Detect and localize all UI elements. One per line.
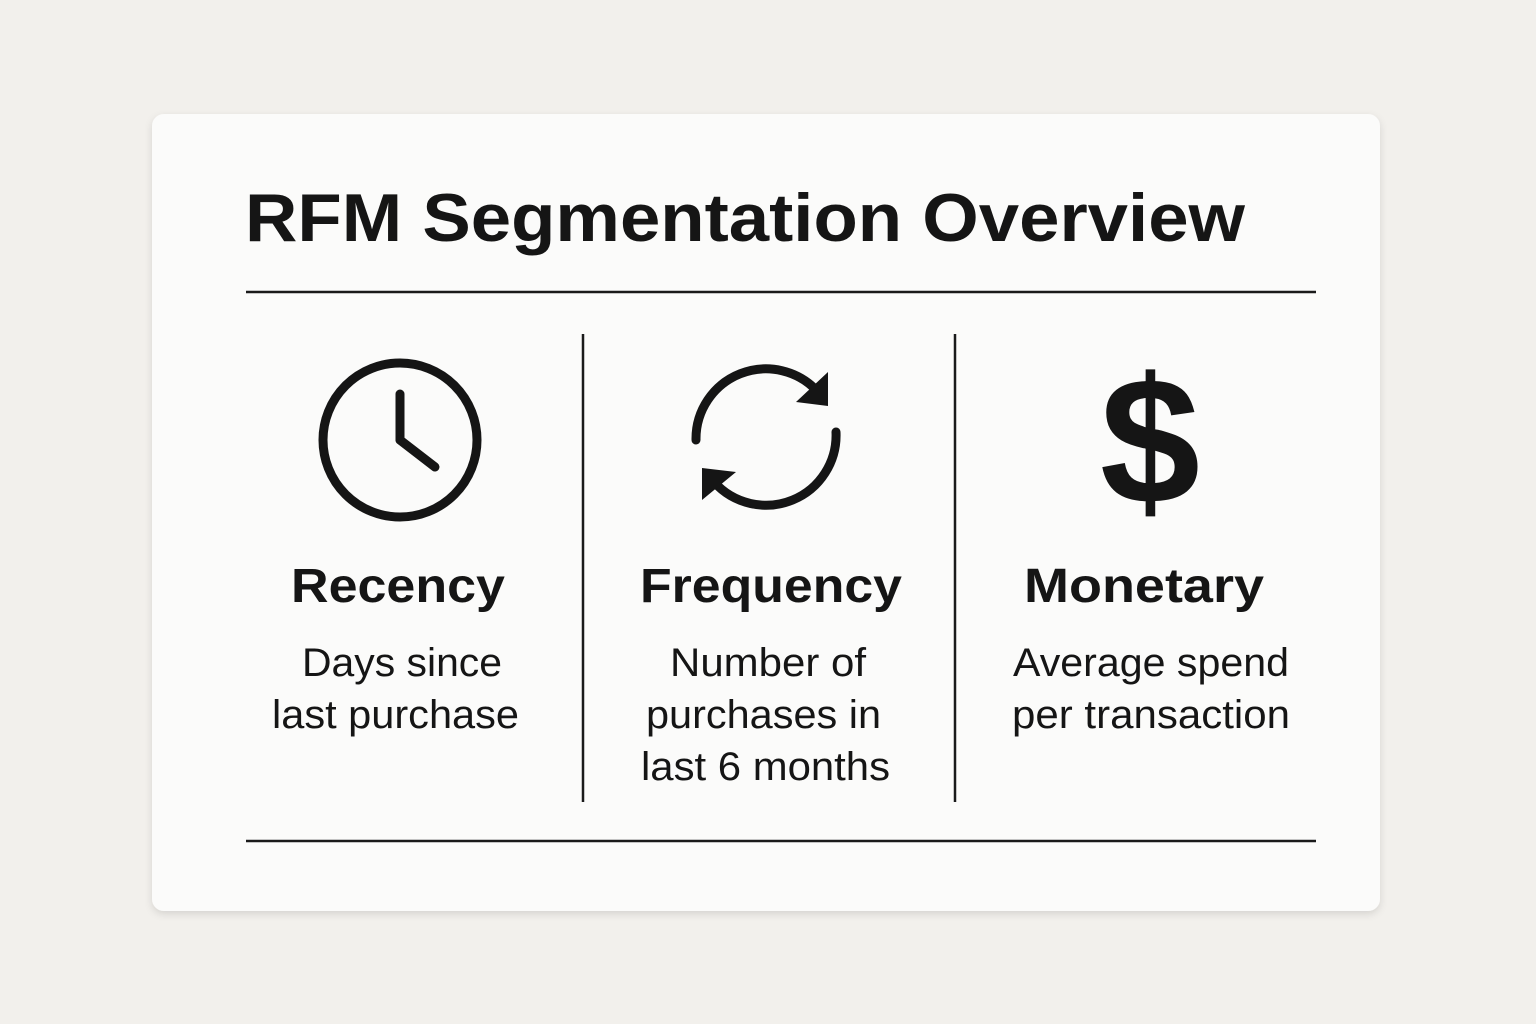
icon: refresh arrows — [696, 369, 836, 505]
description: monetary — [1012, 641, 1290, 737]
panel: frequency — [640, 369, 902, 789]
heading: Recency: Recency — [291, 560, 505, 613]
description: frequency: Number of — [670, 641, 867, 685]
description: frequency: purchases in — [646, 693, 881, 737]
title: RFM Segmentation Overview — [245, 180, 1246, 256]
icon: clock — [323, 363, 477, 517]
panel: monetary — [1012, 341, 1290, 737]
description: recency: Days since — [302, 641, 502, 685]
description: monetary: per transaction — [1012, 693, 1290, 737]
heading: Frequency: Frequency — [640, 560, 902, 613]
description: monetary: Average spend — [1013, 641, 1289, 685]
panel: recency — [272, 363, 519, 737]
description: frequency — [641, 641, 890, 789]
card panel — [152, 114, 1380, 911]
heading: Monetary: Monetary — [1024, 560, 1264, 613]
icon: dollar sign: $ — [1100, 341, 1200, 542]
description: recency: last purchase — [272, 693, 519, 737]
description: frequency: last 6 months — [641, 745, 890, 789]
description: recency — [272, 641, 519, 737]
